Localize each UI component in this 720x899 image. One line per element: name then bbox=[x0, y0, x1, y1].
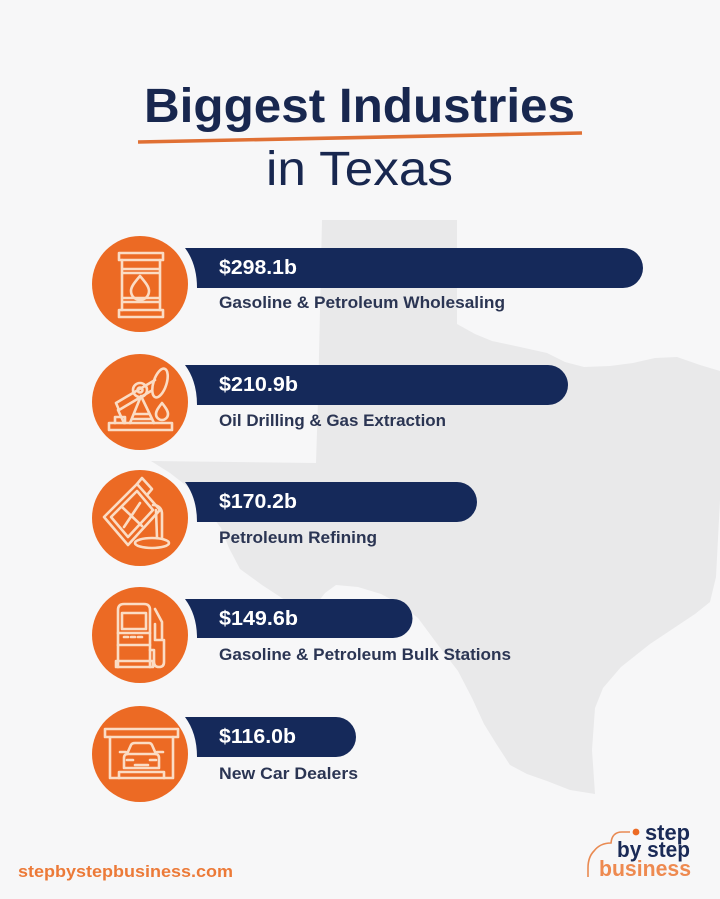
bar 1 bbox=[185, 248, 643, 288]
icon: fuel pump bbox=[92, 587, 188, 683]
value 4: $149.6b bbox=[219, 607, 298, 630]
bar 2 bbox=[185, 365, 568, 405]
logo: step by step business: by step bbox=[617, 837, 690, 862]
logo: step by step business: business bbox=[599, 856, 691, 881]
label 4: Gasoline & Petroleum Bulk Stations bbox=[219, 646, 511, 664]
value 5: $116.0b bbox=[219, 725, 296, 748]
logo: step by step business: step bbox=[645, 820, 690, 845]
row 4: Gasoline and Petroleum Bulk Stations bbox=[92, 587, 511, 683]
bar 4 bbox=[185, 599, 412, 638]
logo: step by step business bbox=[588, 820, 691, 881]
bar 3 bbox=[185, 482, 477, 522]
label 2: Oil Drilling & Gas Extraction bbox=[219, 412, 446, 430]
Texas map silhouette bbox=[151, 220, 720, 794]
website footer: stepbystepbusiness.com bbox=[18, 862, 233, 881]
bar 5 bbox=[185, 717, 356, 757]
row 3: Petroleum Refining bbox=[92, 470, 477, 566]
title bbox=[138, 80, 582, 196]
row 1: Gasoline and Petroleum Wholesaling bbox=[92, 236, 643, 332]
icon: tilted fuel can bbox=[92, 470, 188, 566]
row 2: Oil Drilling and Gas Extraction bbox=[92, 354, 568, 450]
icon: oil barrel bbox=[92, 236, 188, 332]
value 3: $170.2b bbox=[219, 490, 297, 513]
icon: pumpjack bbox=[92, 354, 188, 450]
row 5: New Car Dealers bbox=[92, 706, 358, 802]
label 3: Petroleum Refining bbox=[219, 529, 377, 547]
label 5: New Car Dealers bbox=[219, 765, 358, 783]
heading line 2: in Texas bbox=[266, 143, 453, 196]
heading line 1: Biggest Industries bbox=[144, 80, 575, 133]
icon: car in garage bbox=[92, 706, 188, 802]
label 1: Gasoline & Petroleum Wholesaling bbox=[219, 294, 505, 312]
heading underline bbox=[138, 133, 582, 142]
value 1: $298.1b bbox=[219, 256, 297, 279]
value 2: $210.9b bbox=[219, 373, 298, 396]
